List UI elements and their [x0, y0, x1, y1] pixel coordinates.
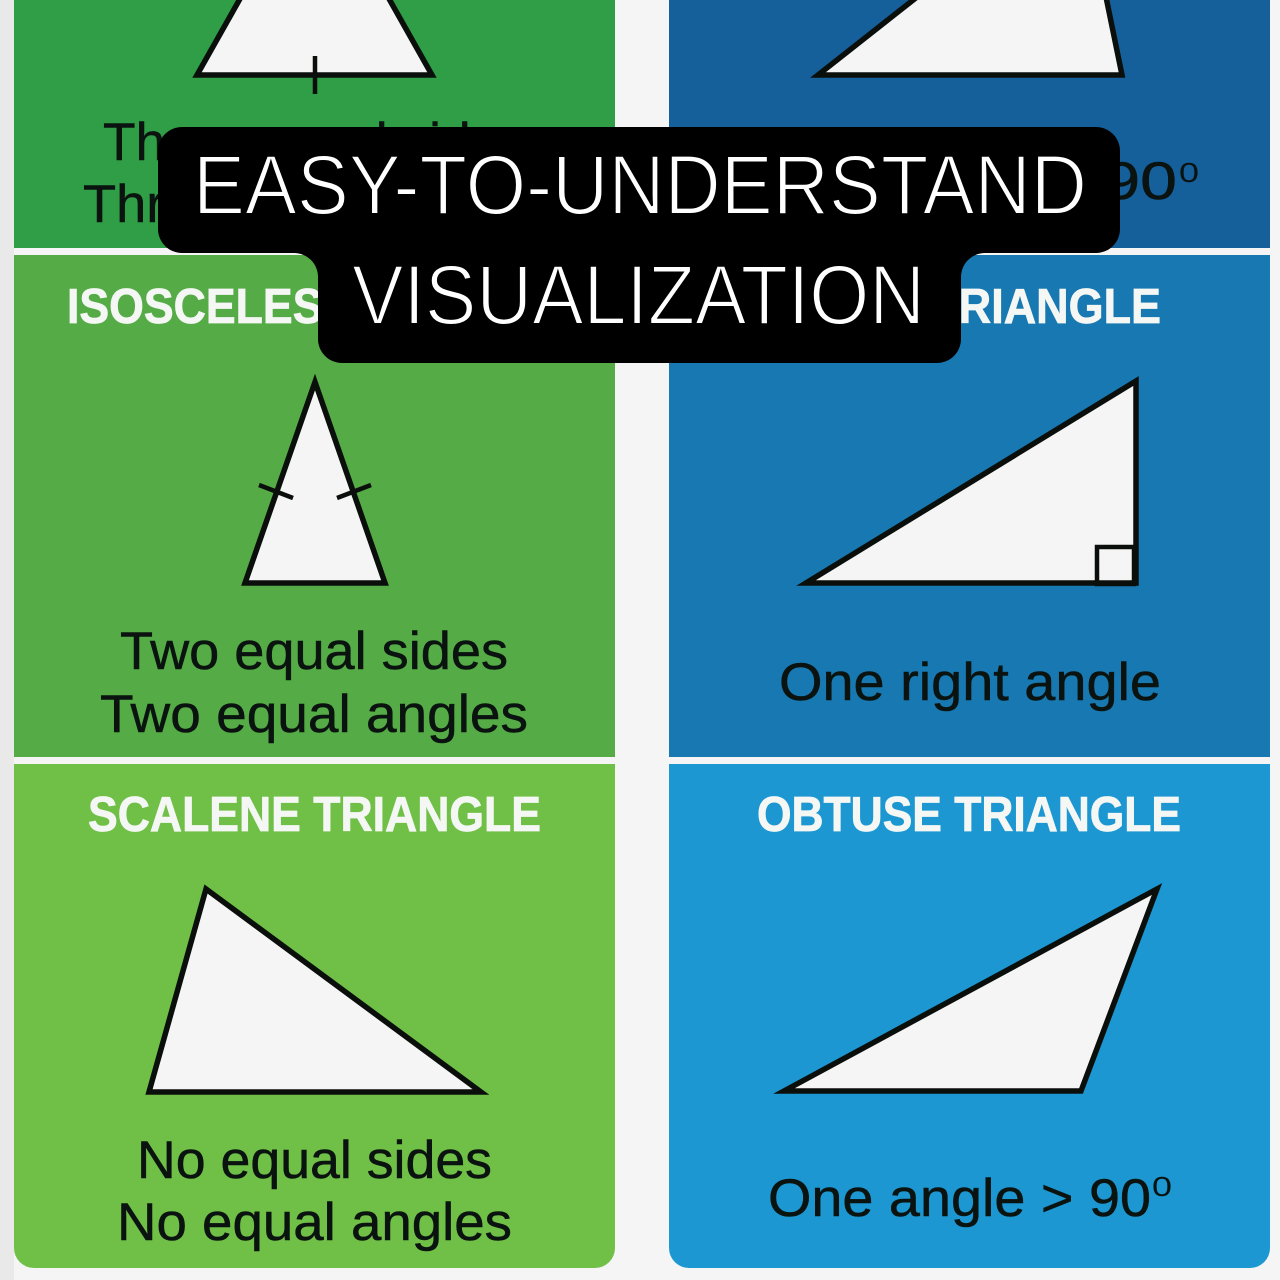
panel: scalene triangle [14, 764, 615, 1268]
text: scalene description: No equal sides [137, 1131, 492, 1190]
icon: acute triangle [818, 0, 1122, 75]
heading: isosceles triangle: ISOSCELES TRIANGLE [67, 280, 563, 334]
icon: obtuse triangle [784, 889, 1157, 1091]
panel: right triangle [669, 255, 1270, 757]
panel: obtuse triangle [669, 764, 1270, 1268]
text: acute description: All angles < 90 [741, 152, 1177, 211]
text: equilateral description [83, 113, 547, 234]
text: obtuse description: One angle > 90 [768, 1169, 1151, 1228]
text: obtuse description: 0 [1152, 1171, 1172, 1202]
text: scalene description [117, 1131, 512, 1252]
text: isosceles description [100, 622, 528, 744]
caption line 1: EASY-TO-UNDERSTAND [193, 138, 1087, 232]
heading: obtuse triangle: OBTUSE TRIANGLE [757, 788, 1181, 842]
heading: scalene triangle: SCALENE TRIANGLE [88, 788, 541, 842]
text: equilateral description: Three equal sides [103, 113, 527, 172]
icon: isosceles triangle [245, 382, 385, 583]
caption line 2: VISUALIZATION [352, 248, 925, 342]
icon: right triangle [806, 381, 1136, 584]
panel: equilateral triangle [14, 0, 615, 248]
panel: isosceles triangle [14, 255, 615, 757]
text: right triangle description: One right angle [779, 653, 1161, 712]
panel: acute triangle [669, 0, 1270, 248]
text: isosceles description: Two equal sides [120, 622, 508, 681]
text: scalene description: No equal angles [117, 1193, 512, 1252]
icon: scalene triangle [149, 889, 481, 1092]
text: equilateral description: Three equal angles [83, 175, 547, 234]
icon: equilateral triangle [197, 0, 432, 94]
text: isosceles description: Two equal angles [100, 685, 528, 744]
heading: right triangle: RIGHT TRIANGLE [779, 280, 1161, 334]
caption banner: easy-to-understand visualization [158, 127, 1120, 363]
text: acute description: 0 [1179, 157, 1199, 188]
